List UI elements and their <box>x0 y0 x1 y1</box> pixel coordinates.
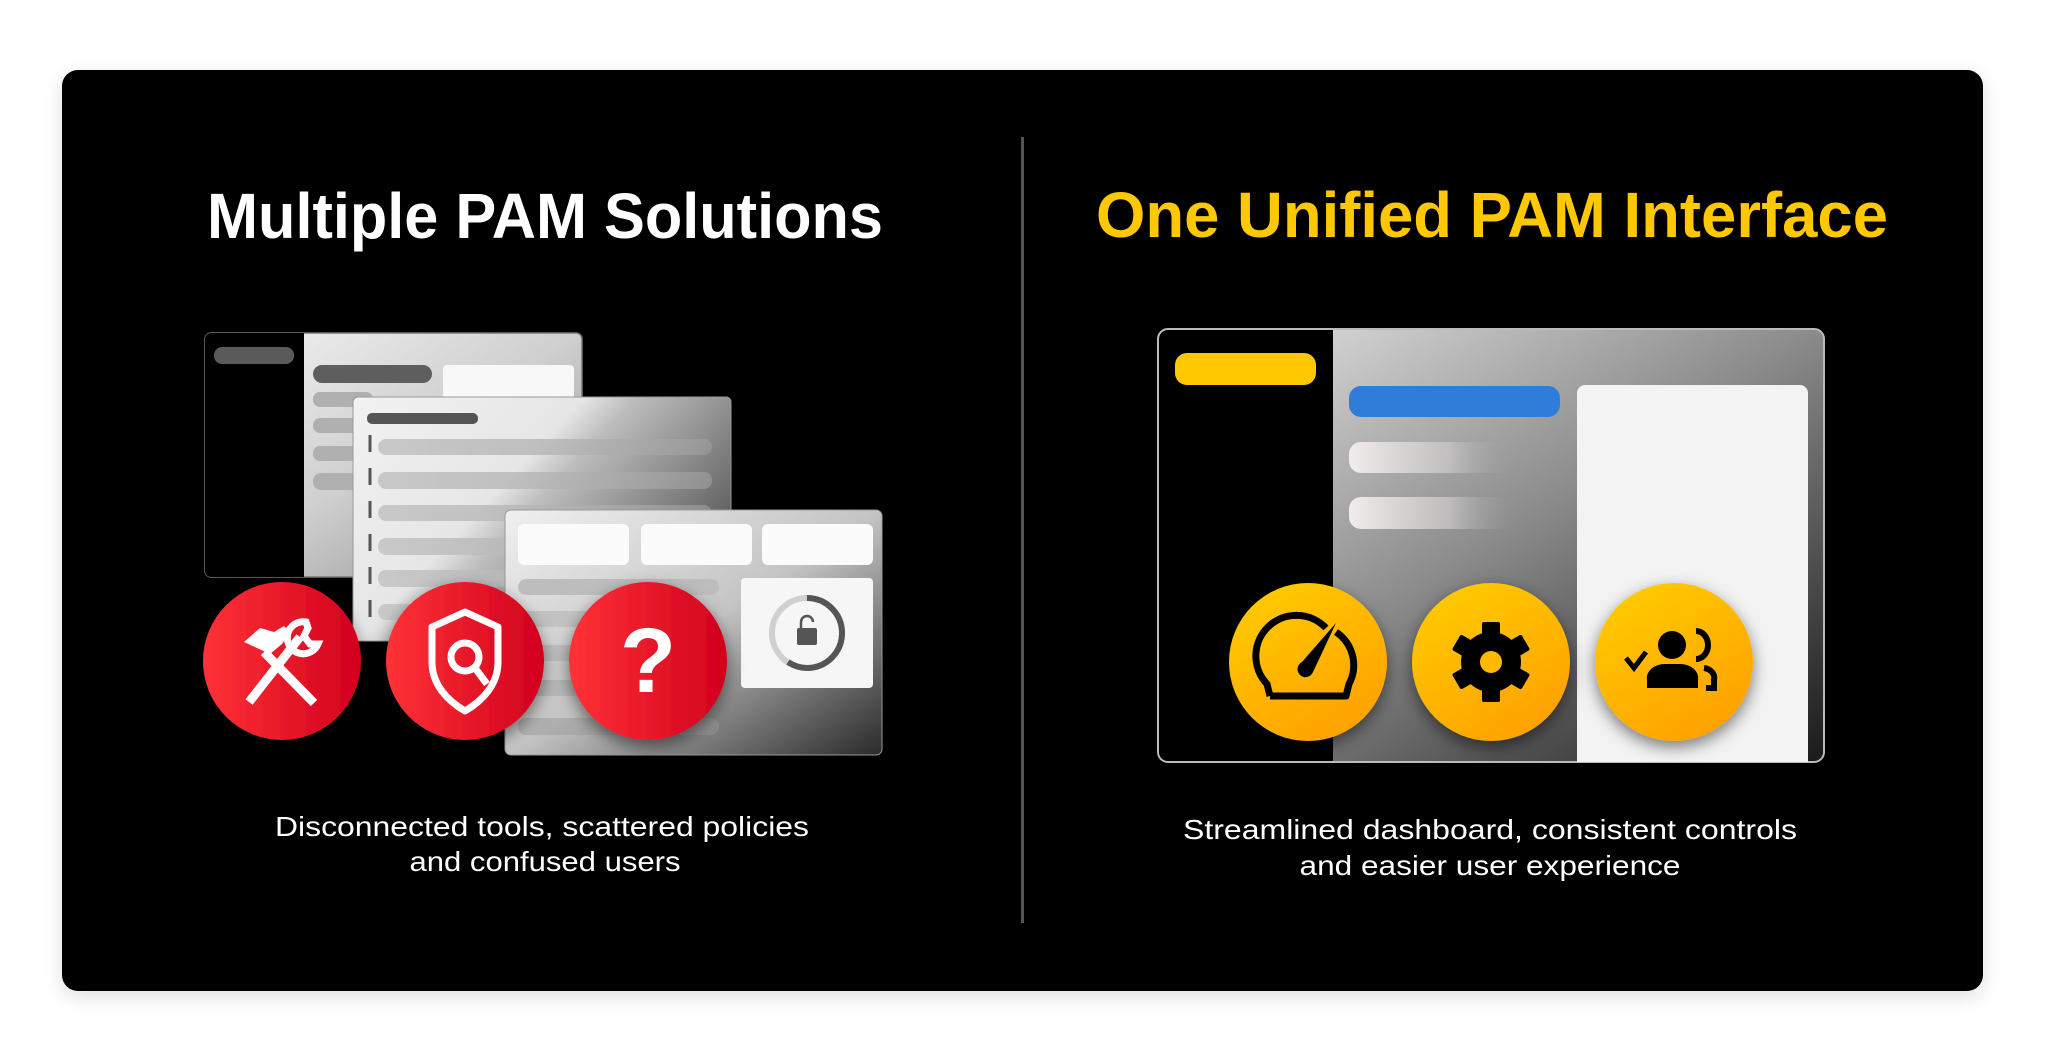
icon: shield search <box>386 582 544 740</box>
icon: users check <box>1595 583 1753 741</box>
window 1 <box>205 333 582 577</box>
icon: gear <box>1412 583 1570 741</box>
illustration: unified window <box>1158 329 1824 762</box>
lock tile <box>741 578 873 688</box>
caption: right: Streamlined dashboard, consistent controls <box>1183 814 1797 845</box>
title: right: One Unified PAM Interface <box>1096 179 1888 251</box>
icon: question: ? <box>620 610 676 712</box>
window 2 <box>353 397 731 641</box>
caption: right: and easier user experience <box>1300 850 1680 881</box>
illustration: multiple windows <box>203 333 882 755</box>
window 3 <box>505 510 882 755</box>
divider <box>1021 137 1024 923</box>
caption: right <box>1183 814 1797 881</box>
title: left: Multiple PAM Solutions <box>207 180 883 252</box>
icon: speedometer <box>1229 583 1387 741</box>
caption: left <box>275 811 809 877</box>
caption: left: Disconnected tools, scattered policies <box>275 811 809 842</box>
caption: left: and confused users <box>410 846 680 877</box>
icon: question <box>569 582 727 740</box>
icon: tools <box>203 582 361 740</box>
